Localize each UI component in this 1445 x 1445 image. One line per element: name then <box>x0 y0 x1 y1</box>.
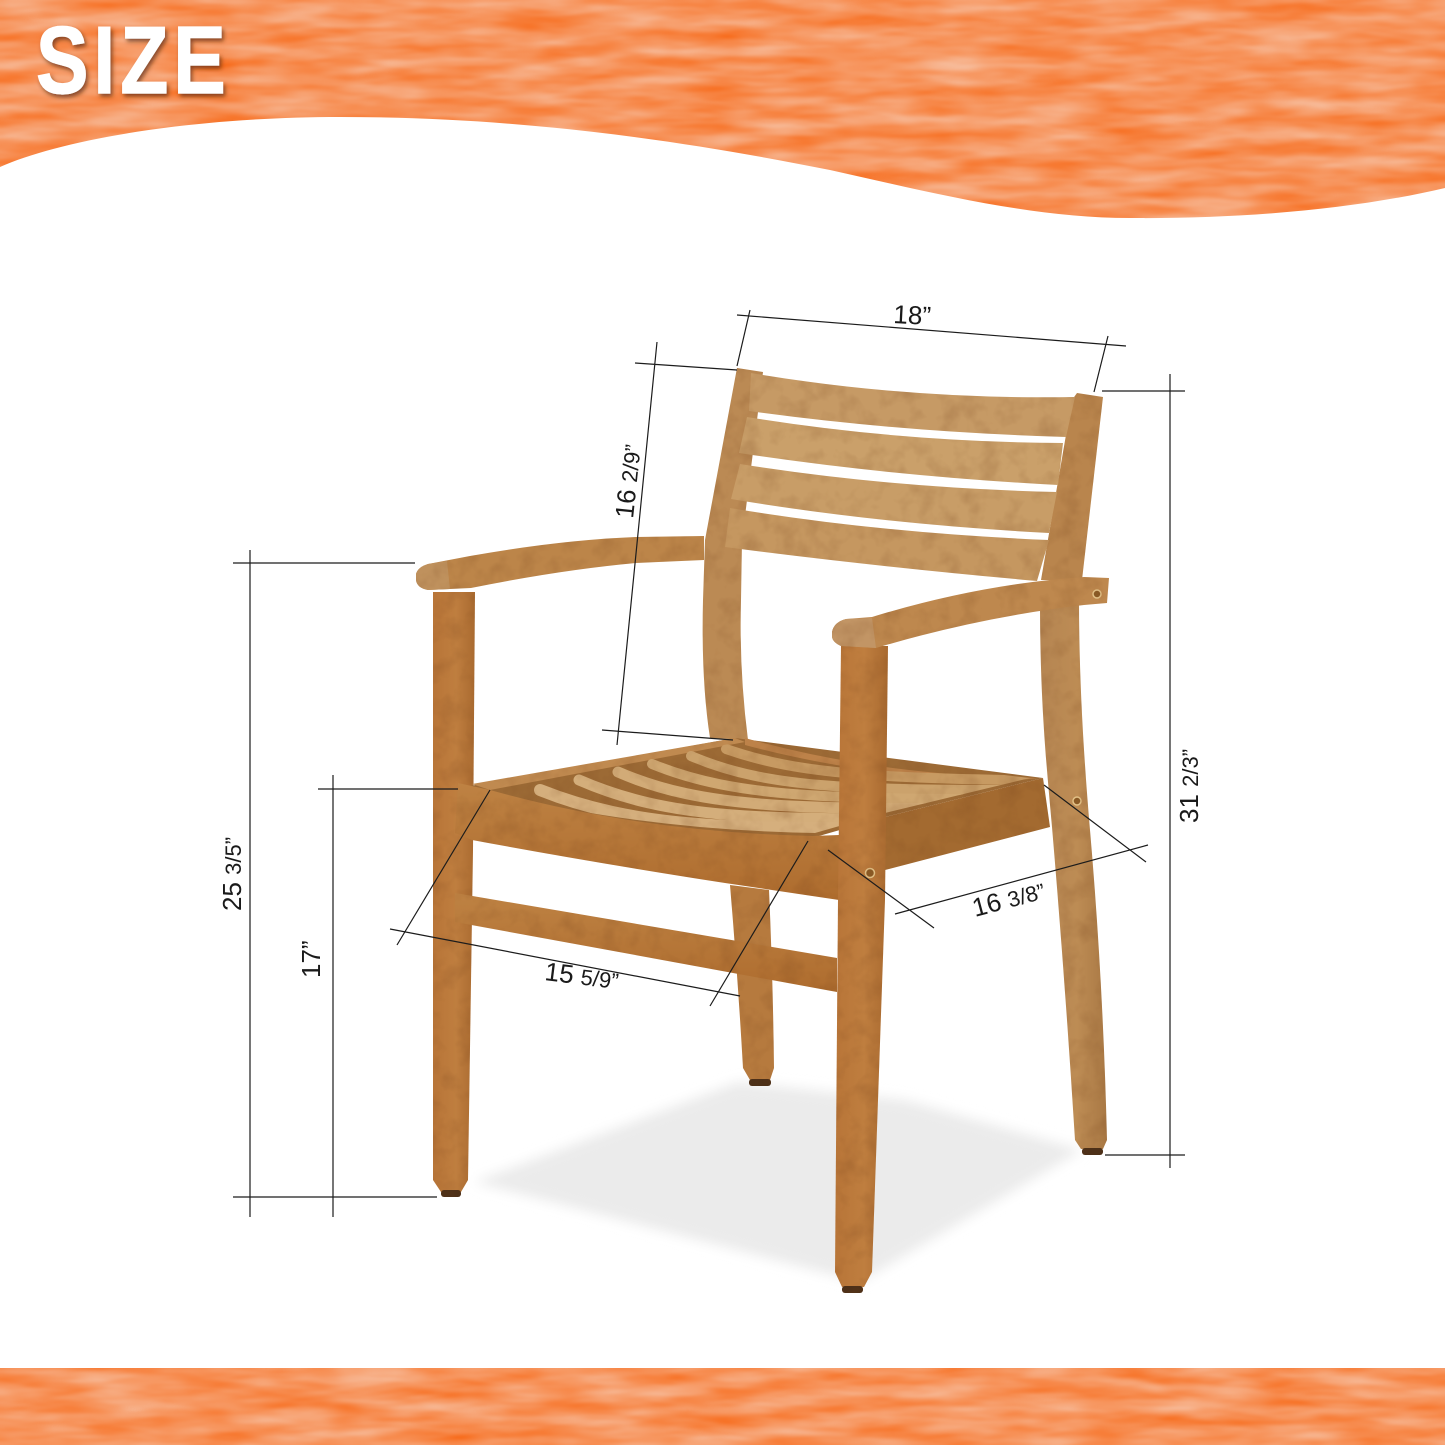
seat back rail <box>745 738 1038 782</box>
stretcher bar <box>455 893 837 992</box>
back left leg lower <box>730 885 774 1080</box>
back right leg <box>1040 600 1107 1149</box>
label: 25 3/5 inches: 25 3/5” <box>217 837 247 911</box>
label: 18 inches: 18” <box>893 299 932 331</box>
label: 16 3/8 inches: 16 3/8” <box>969 875 1048 923</box>
seat front screw <box>866 868 874 878</box>
chair <box>416 368 1109 1293</box>
top orange wavy banner <box>0 0 1445 218</box>
seat left frame <box>472 738 745 790</box>
back slats <box>725 373 1075 581</box>
left arm <box>416 536 704 590</box>
left front foot <box>441 1190 461 1197</box>
slat 1 <box>749 373 1075 437</box>
front right leg <box>835 646 888 1287</box>
arm screw <box>1093 590 1101 598</box>
right arm end grain <box>832 618 876 648</box>
label: 16 2/9 inches: 16 2/9” <box>609 443 647 520</box>
dimension lines <box>233 310 1185 1217</box>
right back post <box>1041 393 1103 580</box>
label: 31 2/3 inches: 31 2/3” <box>1174 749 1204 823</box>
slat 2 <box>739 417 1063 485</box>
back height line <box>602 342 737 745</box>
back left post <box>703 368 763 740</box>
seat back screw <box>1073 797 1081 805</box>
slat 4 <box>725 508 1049 581</box>
back left foot <box>749 1079 771 1086</box>
label: 17 inches: 17” <box>296 940 326 978</box>
width line 18 <box>737 310 1126 392</box>
arm height line <box>233 550 437 1217</box>
seat surface <box>470 738 1043 838</box>
screws <box>866 590 1101 878</box>
right arm <box>832 577 1109 648</box>
chair floor shadow <box>474 1082 1082 1282</box>
title: SIZE <box>36 7 231 114</box>
slat 3 <box>731 464 1057 533</box>
left arm end grain <box>416 561 450 590</box>
right side rail <box>885 778 1050 870</box>
label: 15 5/9 inches: 15 5/9” <box>543 956 620 995</box>
seat height line <box>318 775 458 1217</box>
seat slats <box>540 749 1060 828</box>
front rail <box>455 783 839 900</box>
seat depth line <box>828 785 1148 928</box>
front right foot <box>842 1286 863 1293</box>
overall height line <box>1102 374 1185 1168</box>
bottom orange band <box>0 1368 1445 1445</box>
back right foot <box>1082 1148 1103 1155</box>
seat width line <box>390 790 808 1006</box>
left front leg <box>433 592 475 1192</box>
